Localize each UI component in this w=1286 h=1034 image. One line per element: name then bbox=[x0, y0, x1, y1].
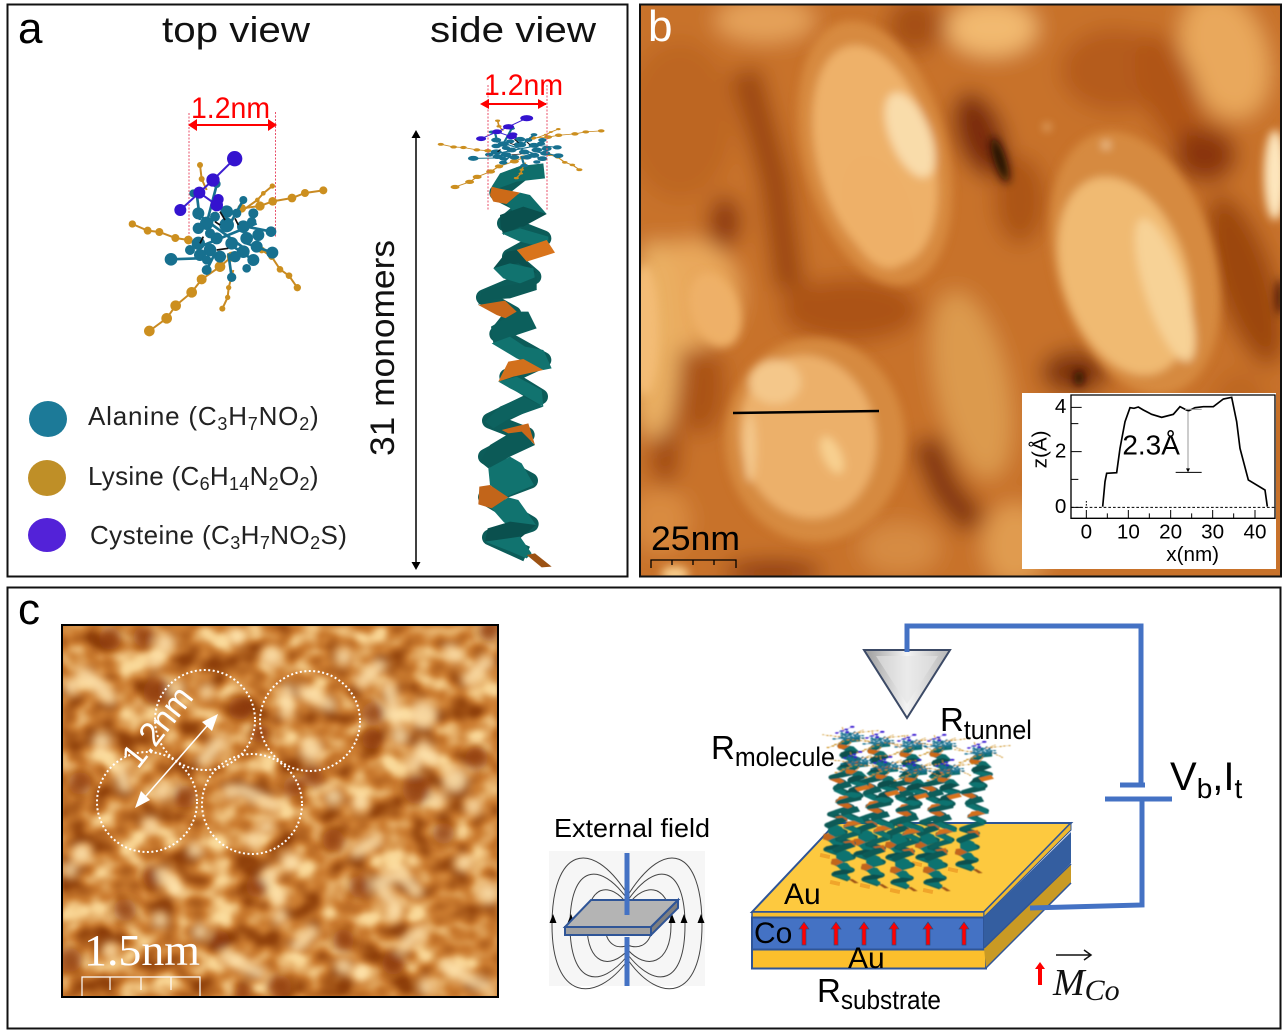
panel letter b: b bbox=[648, 2, 672, 51]
label: R substrate: substrate bbox=[841, 985, 941, 1015]
label: R molecule: R bbox=[711, 729, 735, 766]
pit: dark hole bbox=[987, 135, 1013, 185]
label: Au top: Au bbox=[784, 878, 821, 911]
legend: lysine: N bbox=[250, 461, 269, 491]
dimension: side view 1.2nm bbox=[480, 69, 563, 210]
axis numbers: 0 bbox=[1081, 520, 1092, 543]
panel letter c: c bbox=[18, 585, 40, 634]
axis numbers: 0 bbox=[1055, 495, 1066, 518]
profile curve bbox=[1103, 397, 1267, 507]
heading: top view: top view bbox=[162, 9, 311, 50]
label: R molecule: molecule bbox=[735, 742, 835, 772]
legend: alanine: 3 bbox=[217, 414, 228, 434]
legend: alanine: 7 bbox=[248, 414, 259, 434]
molecule: top view bbox=[129, 151, 327, 336]
legend: lysine: ) bbox=[310, 461, 319, 491]
axis numbers: 30 bbox=[1201, 520, 1224, 543]
legend: lysine: 6 bbox=[200, 474, 210, 494]
legend: cysteine: NO bbox=[270, 520, 310, 550]
field lines bbox=[552, 858, 702, 989]
panel: c, STM setup bbox=[8, 585, 1280, 1028]
panel: a, molecular structure bbox=[8, 4, 628, 576]
legend: cysteine: H bbox=[241, 520, 260, 550]
magnet plate bbox=[565, 900, 678, 927]
legend: cysteine: 7 bbox=[260, 533, 270, 553]
labels: layers bbox=[754, 878, 885, 975]
AFM image: terraces bbox=[620, 0, 1286, 596]
label: R tunnel: R bbox=[940, 701, 964, 738]
heading: side view: side view bbox=[430, 9, 597, 50]
legend: lysine: 2 bbox=[300, 474, 310, 494]
legend: alanine: NO bbox=[259, 401, 299, 431]
legend: alanine bbox=[29, 401, 320, 437]
step label: 2.3Å bbox=[1122, 429, 1180, 460]
dimension: top view 1.2nm bbox=[188, 92, 277, 238]
legend: cysteine: Cysteine (C bbox=[90, 520, 230, 550]
panel letter a: a bbox=[18, 4, 43, 53]
molecule outlines: dotted circles bbox=[97, 670, 360, 854]
label: Vb, It: V bbox=[1170, 755, 1197, 799]
legend: lysine: H bbox=[210, 461, 229, 491]
label: 1.2nm: 1.2nm bbox=[114, 679, 201, 775]
terrace: upper oval bbox=[796, 20, 954, 288]
label: Vb, It: ,I bbox=[1212, 755, 1234, 799]
legend: lysine: 14 bbox=[229, 474, 250, 494]
scale bar: 25nm: 25nm bbox=[651, 520, 740, 558]
icon: external field magnet bbox=[549, 851, 705, 989]
legend: cysteine: 3 bbox=[230, 533, 241, 553]
label: Co: Co bbox=[754, 917, 792, 950]
molecule array bbox=[821, 726, 1011, 891]
circuit wire bbox=[907, 626, 1142, 908]
legend: lysine bbox=[28, 460, 319, 496]
magnetization arrows in Co bbox=[799, 922, 969, 945]
legend: alanine: Alanine (C bbox=[88, 401, 217, 431]
chart axes bbox=[1071, 395, 1275, 518]
axis title x: x(nm) bbox=[1166, 543, 1219, 566]
molecule shadows on gold bbox=[820, 853, 958, 894]
axis numbers: 2 bbox=[1055, 440, 1066, 463]
line profile marker bbox=[733, 411, 879, 413]
terrace: right oval bbox=[1046, 130, 1224, 393]
scale bar: 1.5nm: 1.5nm bbox=[84, 926, 200, 975]
axis numbers bbox=[1055, 395, 1266, 543]
label: R tunnel: tunnel bbox=[964, 715, 1032, 745]
legend: magnetization bbox=[1035, 950, 1120, 1007]
label: 31 monomers: 31 monomers bbox=[364, 240, 402, 456]
label: external field: External field bbox=[554, 813, 710, 843]
step annotation bbox=[1185, 409, 1202, 468]
terrace: lower oval bbox=[725, 338, 905, 542]
STM tip bbox=[864, 650, 950, 718]
inset: height profile chart bbox=[1022, 393, 1276, 569]
label: Vb, It: t bbox=[1234, 773, 1242, 804]
axis title z: z(Å) bbox=[1029, 430, 1052, 468]
panel: b, AFM topography bbox=[620, 0, 1286, 596]
substrate: Au/Co/Au stack bbox=[752, 823, 1071, 968]
axis numbers: 20 bbox=[1159, 520, 1182, 543]
label: Au bottom: Au bbox=[848, 942, 885, 975]
molecule: side view helix bbox=[438, 115, 605, 567]
legend: magnetization: Co bbox=[1085, 974, 1120, 1007]
scale bar: 1.5nm bbox=[82, 926, 200, 996]
legend: alanine: 2 bbox=[299, 414, 310, 434]
legend: lysine: 2 bbox=[269, 474, 279, 494]
legend: lysine: Lysine (C bbox=[88, 461, 200, 491]
legend: alanine: ) bbox=[310, 401, 320, 431]
axis numbers: 10 bbox=[1117, 520, 1140, 543]
legend: magnetization: M bbox=[1053, 962, 1085, 1004]
legend: cysteine: S) bbox=[320, 520, 347, 550]
legend: alanine: H bbox=[228, 401, 248, 431]
legend: lysine: O bbox=[279, 461, 300, 491]
battery symbol bbox=[1105, 785, 1172, 799]
legend: cysteine: 2 bbox=[310, 533, 320, 553]
axis numbers: 40 bbox=[1244, 520, 1266, 543]
label: R substrate: R bbox=[817, 972, 841, 1009]
STM image bbox=[58, 619, 501, 1001]
legend bbox=[28, 401, 347, 553]
dimension: side view 1.2nm: 1.2nm bbox=[484, 69, 563, 102]
terrace: left lobes bbox=[641, 264, 660, 394]
legend: cysteine bbox=[28, 518, 347, 553]
dimension: top view 1.2nm: 1.2nm bbox=[191, 92, 270, 125]
arrow: molecule length bbox=[412, 130, 420, 570]
label: Vb, It: b bbox=[1197, 773, 1212, 804]
arrow: molecule diameter bbox=[135, 714, 218, 808]
axis numbers: 4 bbox=[1055, 395, 1066, 418]
